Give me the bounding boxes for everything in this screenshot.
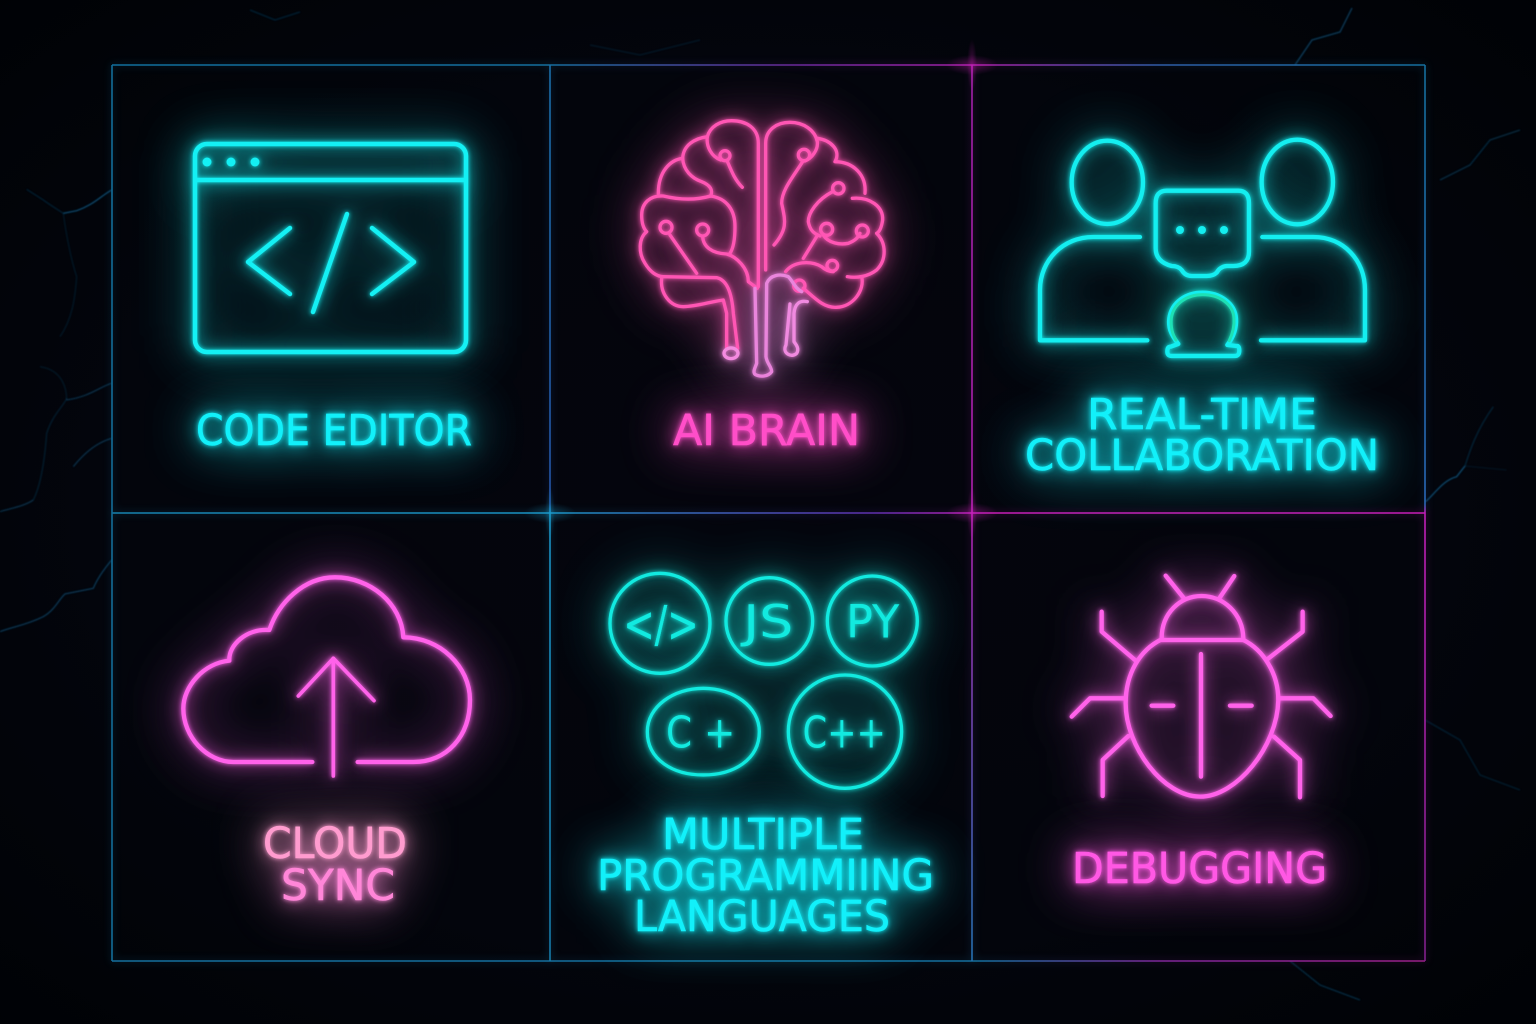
icon: language badges bbox=[610, 573, 917, 788]
heading: multiple programming languages bbox=[597, 810, 934, 942]
heading: real-time collaboration: REAL-TIME bbox=[1087, 390, 1317, 440]
badge: PY: PY bbox=[846, 595, 899, 648]
heading: real-time collaboration: COLLABORATION bbox=[1025, 431, 1379, 481]
heading: real-time collaboration bbox=[1025, 390, 1379, 481]
panel: debugging bbox=[1072, 576, 1331, 894]
grid of six panels bbox=[112, 39, 1425, 961]
heading: cloud sync: SYNC bbox=[281, 861, 395, 911]
badge: C+ bbox=[647, 688, 759, 775]
badge: JS: JS bbox=[740, 595, 793, 648]
panel: code editor bbox=[195, 144, 472, 456]
badge: PY bbox=[827, 576, 917, 666]
heading: cloud sync: CLOUD bbox=[263, 819, 407, 869]
panel: cloud sync bbox=[183, 577, 470, 911]
icon: code editor window bbox=[195, 144, 466, 352]
heading: AI brain: AI BRAIN bbox=[673, 406, 860, 456]
badge: C++ bbox=[788, 675, 902, 788]
icon: two people with chat bubble bbox=[1040, 140, 1365, 356]
badge: C+: C + bbox=[666, 709, 735, 759]
icon: bug bbox=[1072, 576, 1331, 797]
heading: multiple programming languages: PROGRAMMIING bbox=[597, 851, 934, 901]
badge: JS bbox=[726, 578, 813, 664]
heading: multiple programming languages: MULTIPLE bbox=[662, 810, 864, 860]
icon: brain with circuit traces bbox=[640, 121, 884, 376]
badge: html tag: </> bbox=[623, 595, 699, 653]
icon: cloud with upload arrow bbox=[183, 577, 470, 776]
badge: html tag bbox=[610, 573, 710, 673]
panel: real-time collaboration bbox=[1025, 140, 1379, 481]
panel: AI brain bbox=[640, 121, 884, 456]
heading: code editor: CODE EDITOR bbox=[196, 406, 472, 456]
heading: multiple programming languages: LANGUAGES bbox=[634, 892, 890, 942]
panel: multiple programming languages bbox=[597, 573, 934, 942]
badge: C++: C++ bbox=[803, 709, 886, 759]
heading: cloud sync bbox=[263, 819, 407, 911]
heading: debugging: DEBUGGING bbox=[1072, 844, 1327, 894]
